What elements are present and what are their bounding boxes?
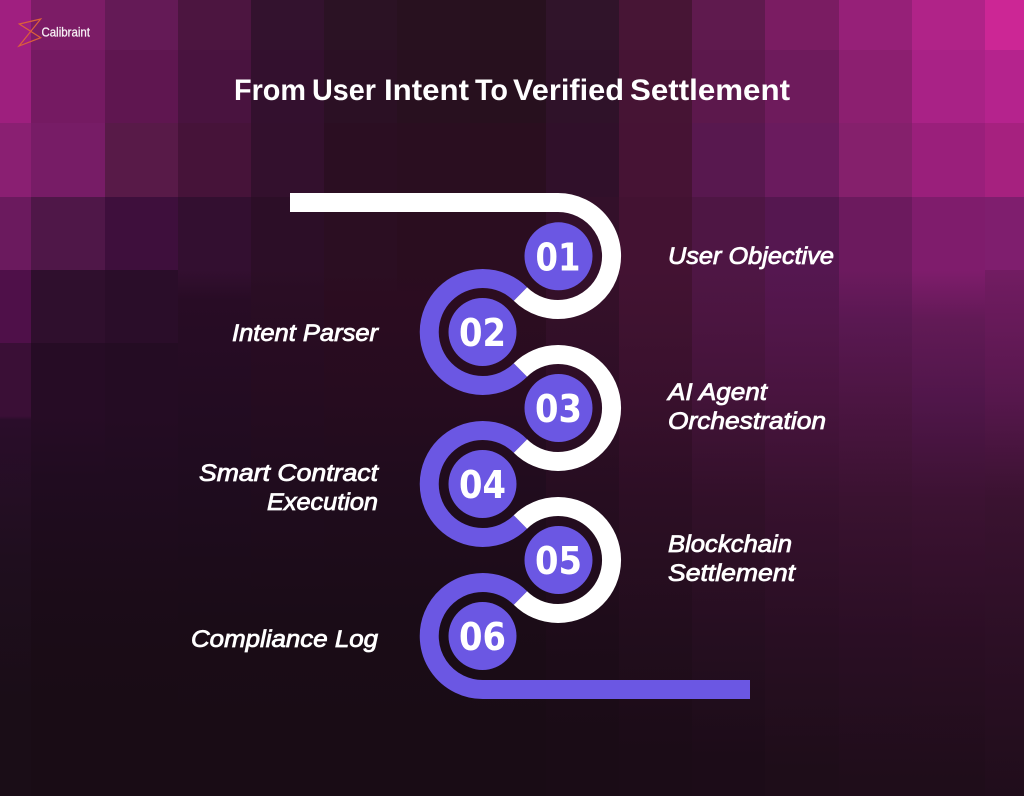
label: AI Agent Orchestration: AI Agent [666,379,768,406]
step 01 badge: 01 [536,236,580,280]
logo wordmark: Calibraint [42,26,90,40]
label: Intent Parser: Intent Parser [232,320,379,347]
step 05 badge [524,526,592,594]
label: Smart Contract Execution: Execution [267,489,378,516]
step 04 badge: 04 [459,463,506,507]
title [234,74,790,107]
label: Smart Contract Execution [199,460,379,516]
step 02 badge [448,298,516,366]
step 02 badge: 02 [459,311,506,355]
segment 01: white entry bar and arc [290,202,612,309]
segment 04: purple arc [429,431,520,538]
step 06 badge: 06 [459,615,506,659]
label: Blockchain Settlement: Blockchain [668,531,792,558]
step 01 badge [524,222,592,290]
step 05 badge: 05 [535,539,582,583]
segment 02: purple arc [429,278,520,385]
label: Smart Contract Execution: Smart Contract [199,460,379,487]
segment 05: white arc [520,506,612,613]
title: Settlement [630,74,790,107]
step 03 badge: 03 [535,387,582,431]
step 04 badge [448,450,516,518]
title: User [312,74,376,107]
label: Blockchain Settlement [668,531,796,587]
label: User Objective: User Objective [668,243,834,270]
step 03 badge [524,374,592,442]
label: AI Agent Orchestration: Orchestration [668,408,826,435]
logo: Calibraint [19,19,90,46]
segment 06: purple arc and exit bar [429,583,750,690]
step 06 badge [448,602,516,670]
icon: logo mark [19,19,41,46]
label: AI Agent Orchestration [666,379,826,435]
label: Compliance Log: Compliance Log [191,626,379,653]
title: To [475,74,508,107]
serpentine timeline path [290,202,750,690]
label: Blockchain Settlement: Settlement [668,560,796,587]
title: From [234,74,306,107]
title: Verified [513,74,624,107]
segment 03: white arc [520,354,612,462]
title: Intent [384,74,469,107]
